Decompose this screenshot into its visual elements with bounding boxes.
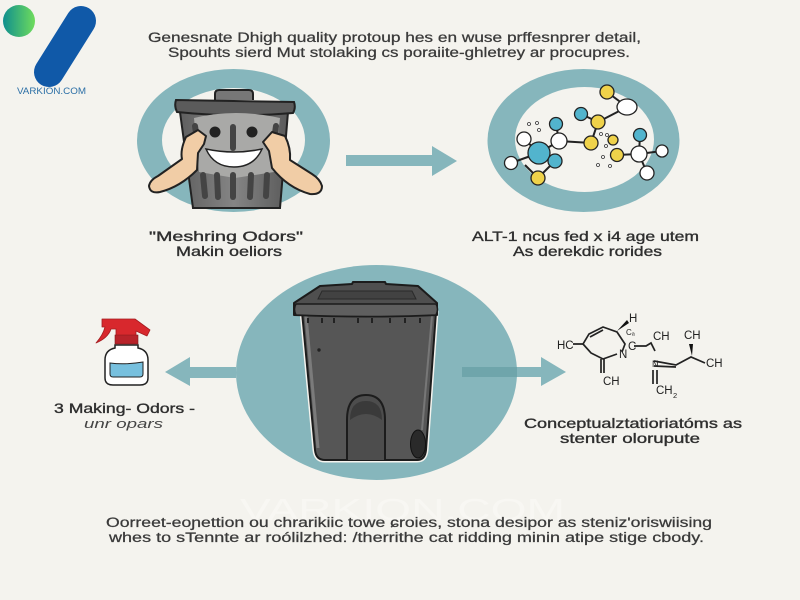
watermark: VARKION.COM [240, 492, 565, 527]
icon: masked trash can in ring [137, 69, 330, 212]
label: right top: As derekdic rorides [513, 243, 662, 259]
icon: spray bottle [96, 319, 150, 385]
lid [294, 282, 437, 316]
label: right top: ALT-1 ncus fed x i4 age utem [472, 228, 699, 244]
center circle [236, 265, 517, 480]
arrow: left [165, 357, 236, 386]
icon: molecule in ring [488, 69, 680, 212]
icon: structural formula: CH [603, 376, 620, 388]
icon: structural formula: Cₐ [626, 328, 636, 337]
label: right lower [524, 415, 742, 446]
intro text [148, 30, 641, 60]
logo: VARKION.COM [17, 86, 86, 97]
icon: structural formula [557, 313, 723, 400]
label: left top [149, 228, 303, 259]
label: left top: Makin oeliors [176, 243, 282, 259]
front recess [347, 395, 385, 460]
left arm and hand [149, 130, 206, 192]
intro text: Genesnate Dhigh quality protoup hes en wuse prffesnprer detail, [148, 30, 641, 45]
label: left top: "Meshring Odors" [149, 228, 303, 244]
closing text [106, 515, 712, 545]
icon: structural formula: N [619, 349, 627, 361]
logo [3, 5, 86, 97]
arrow: top [346, 146, 457, 176]
icon: structural formula: H [629, 313, 637, 325]
icon: structural formula: CH [653, 331, 670, 343]
closing text: Oorreet-eoɲettion ou chrarikiic towe ɕroies, stona desipor as steniz'oriswiising [106, 515, 712, 530]
wheel [410, 430, 426, 458]
label: right lower: stenter olorupute [560, 430, 700, 446]
closing text: whes to sTennte ar roólilzhed: /therrithe cat ridding minin atipe stige cbody. [108, 530, 704, 545]
right arm and hand [263, 132, 322, 194]
icon: structural formula: N [652, 359, 658, 369]
label: right lower: Conceptualztatioriatóms as [524, 415, 742, 431]
icon: structural formula: CH [706, 358, 723, 370]
label: spray [54, 400, 195, 431]
arrow: right [462, 357, 566, 386]
icon: structural formula: CH [656, 385, 673, 397]
label: right top [472, 228, 699, 259]
label: spray: 3 Making- Odors - [54, 400, 195, 416]
icon: large wheelie bin [294, 282, 438, 460]
intro text: Spouhts sierd Mut stolaking cs poraiite-ghletrey ar procupres. [168, 45, 630, 60]
icon: structural formula: C [628, 341, 636, 353]
label: spray: unr opars [84, 416, 164, 431]
icon: structural formula: CH [684, 330, 701, 342]
icon: structural formula: 2 [673, 391, 677, 400]
icon: structural formula: HC [557, 340, 574, 352]
